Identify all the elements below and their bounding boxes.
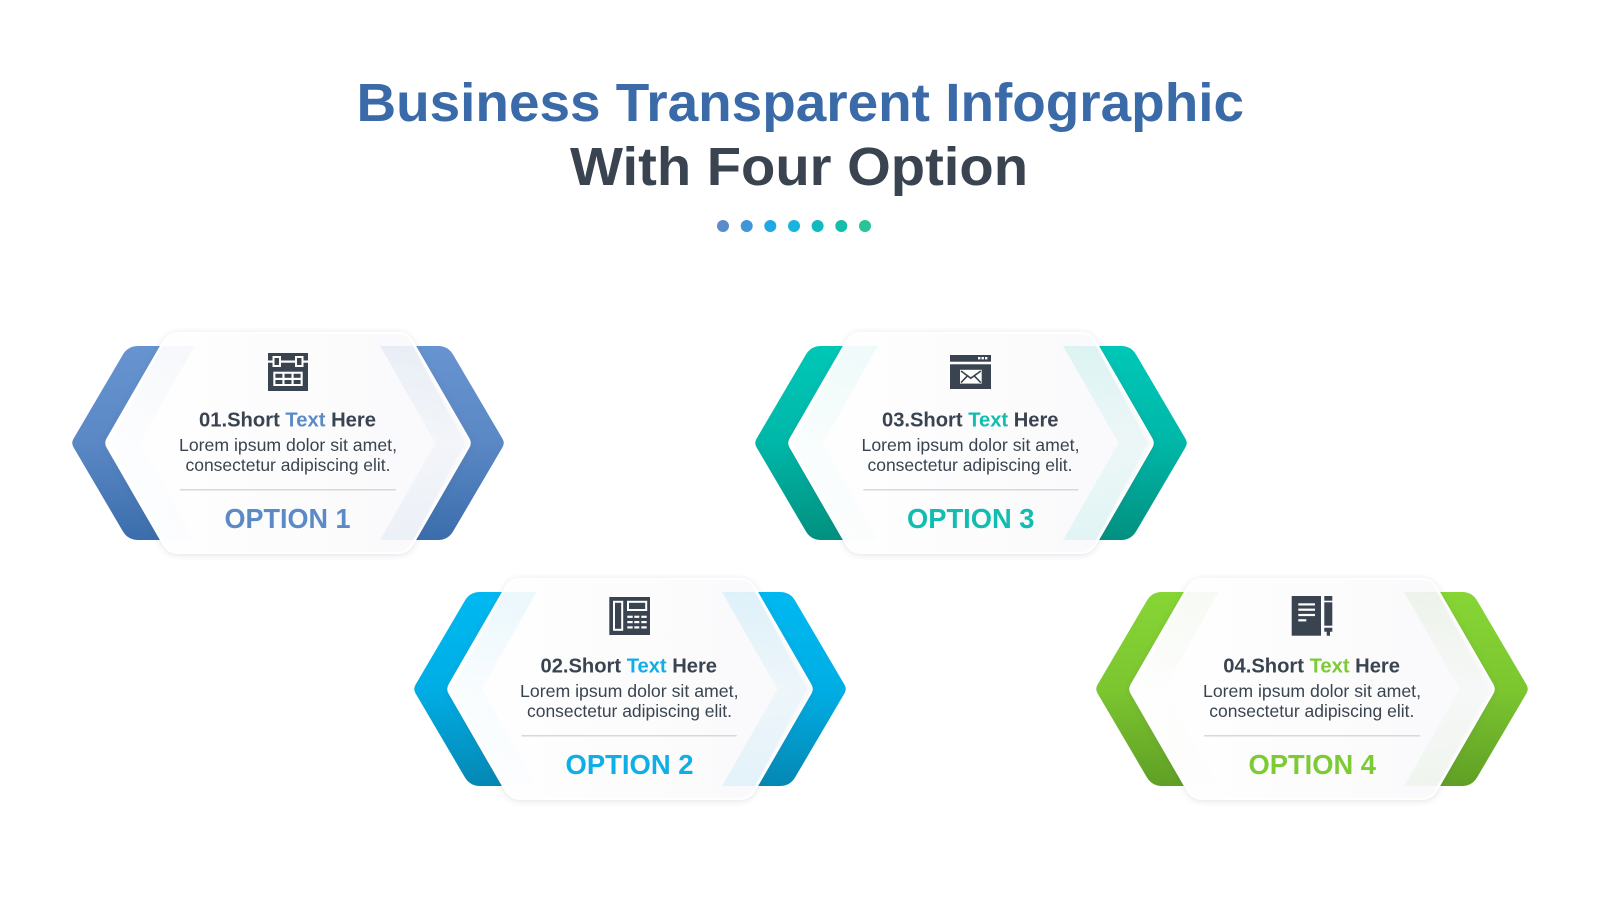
glass card: option 4 <box>1130 579 1494 799</box>
option label 4: OPTION 4 <box>1248 749 1376 780</box>
hexagon background: option 1 <box>72 346 504 540</box>
right tint band <box>380 346 465 540</box>
heading: option 3: 03.Short Text Here <box>882 410 1058 432</box>
left tint band <box>1134 592 1218 786</box>
body text: option 2: Lorem ipsum dolor sit amet, <box>520 681 738 701</box>
title: Business Transparent Infographic <box>356 73 1244 133</box>
right tint band <box>722 592 807 786</box>
panel: option 2 <box>414 579 846 799</box>
glass card: option 1 <box>106 333 470 553</box>
body text: option 4 <box>1203 681 1421 721</box>
panel: option 1 <box>72 333 504 553</box>
body text: option 3 <box>862 435 1080 475</box>
body text: option 1: consectetur adipiscing elit. <box>186 455 390 475</box>
body text: option 4: Lorem ipsum dolor sit amet, <box>1203 681 1421 701</box>
body text: option 4: consectetur adipiscing elit. <box>1209 701 1414 721</box>
heading: option 4: 04.Short Text Here <box>1223 656 1400 678</box>
right tint band <box>1063 346 1148 540</box>
body text: option 1: Lorem ipsum dolor sit amet, <box>179 435 397 455</box>
heading: option 2: 02.Short Text Here <box>540 656 717 678</box>
icon: mail window <box>950 355 991 389</box>
title <box>356 73 1244 197</box>
right tint band <box>1404 592 1489 786</box>
body text: option 1 <box>179 435 397 475</box>
title: With Four Option <box>570 137 1028 197</box>
hexagon background: option 4 <box>1096 592 1528 786</box>
body text: option 2 <box>520 681 738 721</box>
option label 1: OPTION 1 <box>224 503 350 534</box>
icon: calendar <box>268 353 308 391</box>
hexagon background: option 3 <box>755 346 1187 540</box>
icon: notebook and pen <box>1292 596 1332 636</box>
body text: option 3: consectetur adipiscing elit. <box>868 455 1072 475</box>
dots row <box>717 220 871 232</box>
panel: option 3 <box>755 333 1187 553</box>
body text: option 3: Lorem ipsum dolor sit amet, <box>862 435 1080 455</box>
hexagon background: option 2 <box>414 592 846 786</box>
glass card: option 3 <box>789 333 1153 553</box>
body text: option 2: consectetur adipiscing elit. <box>527 701 732 721</box>
option label 3: OPTION 3 <box>907 503 1034 534</box>
option label 2: OPTION 2 <box>566 749 694 780</box>
left tint band <box>793 346 878 540</box>
icon: desk phone <box>609 597 650 635</box>
left tint band <box>452 592 536 786</box>
panel: option 4 <box>1096 579 1528 799</box>
left tint band <box>110 346 194 540</box>
heading: option 1: 01.Short Text Here <box>199 410 376 432</box>
glass card: option 2 <box>448 579 812 799</box>
